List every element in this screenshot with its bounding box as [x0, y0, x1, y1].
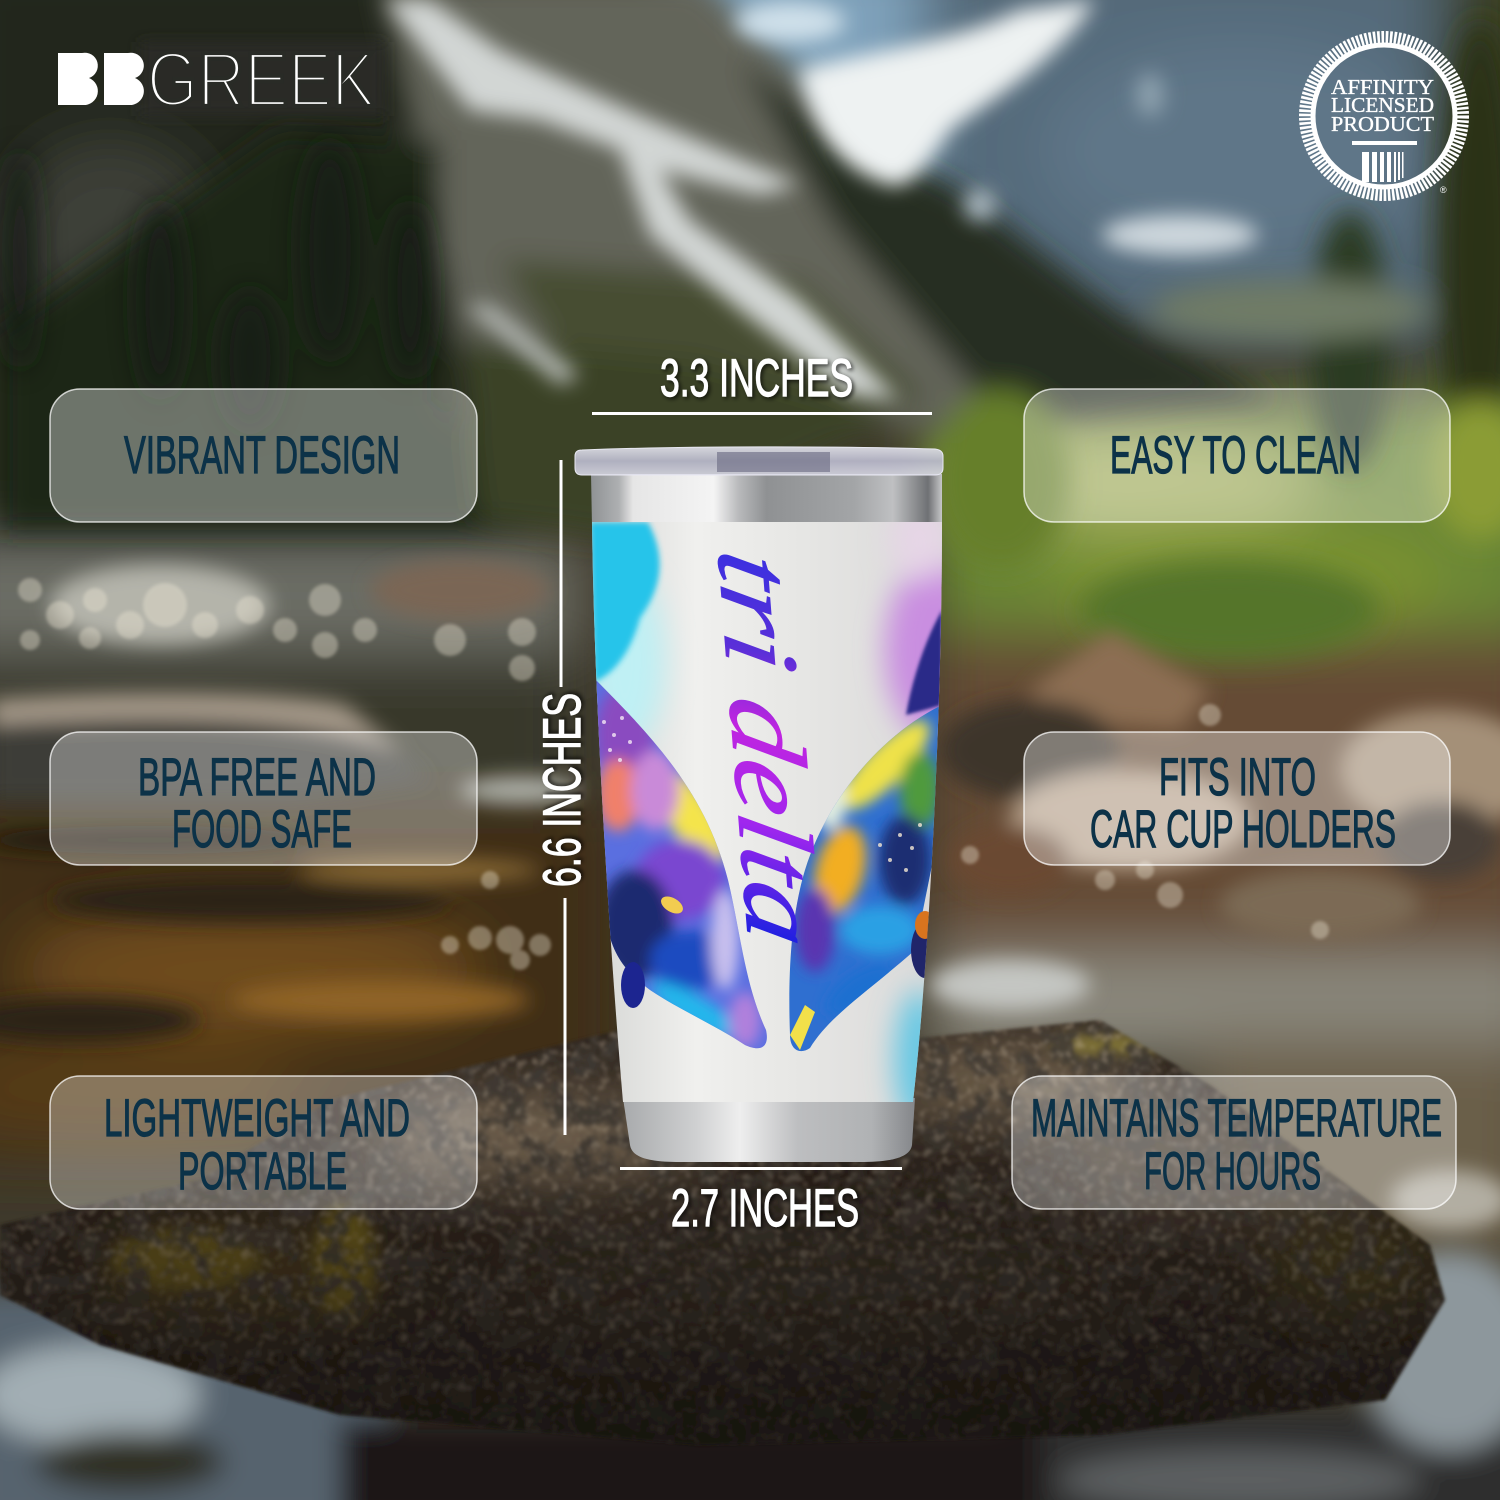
tumbler printed body [592, 522, 942, 1102]
badge: Affinity licensed product [1305, 37, 1463, 195]
right dolphin [906, 610, 942, 715]
logo mark: first B: B [60, 46, 92, 111]
badge: Affinity licensed product: LICENSED [1331, 93, 1434, 117]
logo backing tone [140, 42, 385, 116]
rocks behind [0, 560, 1500, 1230]
dimension: width bottom: 2.7 INCHES [671, 1179, 859, 1238]
left dolphin [596, 680, 767, 1048]
panel: BPA free: FOOD SAFE [172, 800, 352, 859]
badge: Affinity licensed product: AFFINITY [1331, 75, 1434, 99]
tumbler lid [575, 447, 943, 475]
big rock [0, 1018, 1447, 1446]
panel: BPA free: BPA FREE AND [138, 748, 376, 807]
panel: lightweight: LIGHTWEIGHT AND [104, 1089, 410, 1148]
logo mark: second B: B [106, 46, 138, 111]
dimension: width top: 3.3 INCHES [660, 349, 853, 408]
script wordmark: tri delta [695, 544, 842, 955]
forest tree streaks [2, 140, 432, 430]
panel: maintains temperature: FOR HOURS [1144, 1142, 1321, 1201]
badge: Affinity licensed product: ® [1440, 185, 1447, 195]
panel: fits into car cup holders: FITS INTO [1159, 748, 1316, 807]
tumbler top steel [591, 474, 942, 526]
snow and clouds [385, 0, 1258, 400]
panel: fits into car cup holders [1024, 732, 1450, 865]
panel: vibrant design [50, 389, 477, 522]
logo wordmark: GREEK: GREEK [147, 37, 375, 123]
panel: easy to clean [1024, 389, 1450, 522]
mountain slope and forest ridge [0, 0, 1500, 660]
tumbler [575, 447, 985, 1162]
badge: Affinity licensed product: PRODUCT [1331, 112, 1434, 136]
panel: vibrant design: VIBRANT DESIGN [124, 426, 400, 485]
panel: lightweight [50, 1076, 477, 1209]
left dolphin fin [621, 962, 645, 1008]
bottom water [0, 1250, 1500, 1500]
right dolphin fin [911, 923, 928, 978]
water sparkles bokeh [18, 578, 1329, 970]
panel: lightweight: PORTABLE [178, 1142, 347, 1201]
panel: maintains temperature [1012, 1076, 1456, 1209]
panel: BPA free [50, 732, 477, 865]
logo: BB Greek [58, 37, 385, 123]
tumbler base steel [623, 1098, 915, 1162]
dimension: height: 6.6 INCHES [533, 693, 592, 887]
